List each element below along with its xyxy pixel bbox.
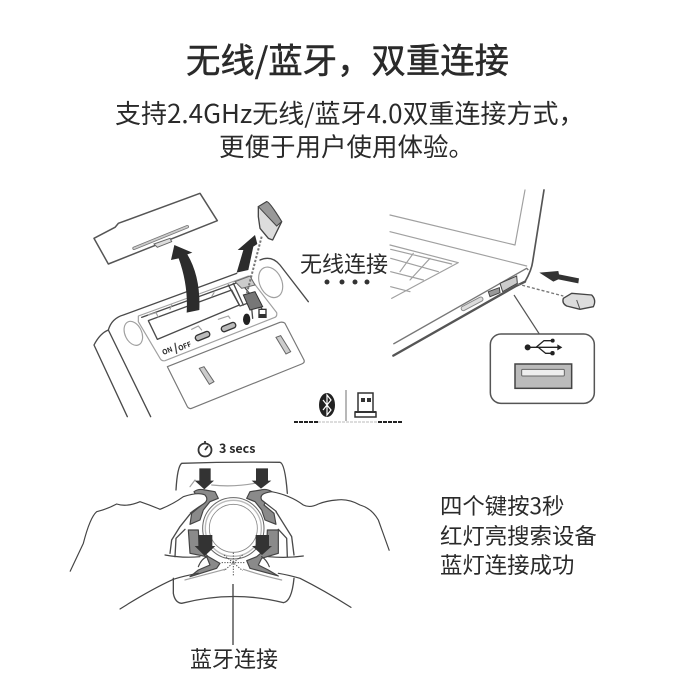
on/off labels — [161, 309, 266, 358]
device body — [173, 462, 294, 603]
keyboard body — [94, 258, 308, 417]
speaker dots — [222, 553, 245, 575]
instructions text: 蓝灯连接成功 — [440, 548, 574, 580]
label: bluetooth connection: 蓝牙连接 — [190, 642, 278, 674]
right hand — [261, 492, 389, 551]
leader line — [514, 295, 539, 334]
on/off labels: ON — [161, 345, 174, 358]
dongle — [258, 202, 282, 240]
intro text: 支持2.4GHz无线/蓝牙4.0双重连接方式， — [115, 94, 585, 131]
key shapes — [188, 489, 278, 577]
icons: bluetooth and usb receiver — [294, 390, 402, 422]
icon: usb symbol — [525, 339, 562, 355]
title: 无线/蓝牙，双重连接 — [186, 33, 509, 83]
timer label — [198, 438, 255, 457]
battery cover — [94, 193, 217, 264]
lower fingers — [120, 555, 351, 609]
instructions text — [440, 489, 597, 580]
on/off labels: OFF — [177, 339, 193, 354]
central ring — [203, 498, 264, 559]
arrow: lift cover — [171, 245, 199, 313]
dotted line to dongle — [247, 237, 262, 294]
press arrows — [195, 468, 272, 556]
label: wireless connection: 无线连接 — [300, 247, 388, 279]
arrow: insert receiver — [539, 271, 579, 283]
timer label: 3 secs — [219, 438, 255, 457]
illustration: laptop with usb receiver — [390, 190, 595, 403]
lower panel — [167, 322, 304, 409]
intro text — [115, 94, 585, 164]
intro text: 更便于用户使用体验。 — [219, 127, 474, 164]
illustration: hands pressing four keys — [70, 462, 389, 645]
instructions text: 红灯亮搜索设备 — [440, 519, 597, 551]
control panel — [138, 276, 277, 361]
illustration: keyboard battery compartment — [94, 193, 308, 417]
side grips — [170, 512, 294, 557]
arrow: lift dongle — [237, 235, 257, 273]
dashed insertion line — [517, 284, 563, 296]
callout: usb port — [490, 334, 594, 403]
laptop — [390, 190, 544, 356]
usb receiver — [563, 293, 595, 309]
usb port — [515, 364, 572, 388]
left hand — [70, 494, 207, 572]
compartment receiver slot — [243, 292, 263, 310]
instructions text: 四个键按3秒 — [440, 489, 564, 521]
leader line — [231, 584, 235, 645]
